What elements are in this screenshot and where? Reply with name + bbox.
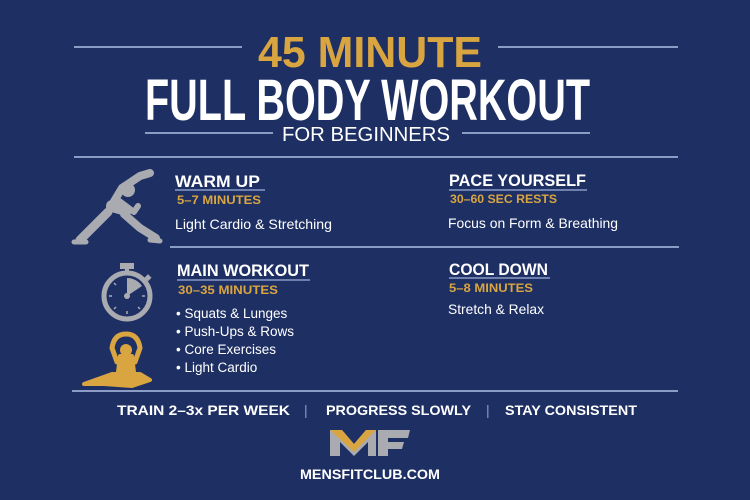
title: 45 minute: 45 MINUTE [258, 28, 482, 77]
footer tips [117, 402, 637, 418]
section: pace yourself: Focus on Form & Breathing [448, 215, 618, 231]
section: cool down [448, 260, 550, 317]
section: main workout: MAIN WORKOUT [177, 261, 310, 280]
section: main workout: • Squats & Lunges [176, 306, 288, 321]
section: cool down: 5–8 MINUTES [449, 281, 533, 295]
icon: yoga figure [84, 334, 150, 386]
subtitle: FOR BEGINNERS [282, 124, 450, 146]
section: main workout: • Core Exercises [176, 342, 276, 357]
section: warm up: 5–7 MINUTES [177, 193, 261, 207]
section: warm up [175, 172, 332, 232]
footer tips: TRAIN 2–3x PER WEEK [117, 402, 290, 418]
footer tips: | [304, 402, 308, 418]
section: cool down: COOL DOWN [449, 260, 548, 279]
section: main workout: 30–35 MINUTES [178, 283, 278, 297]
section: pace yourself: PACE YOURSELF [449, 171, 586, 190]
footer tips: STAY CONSISTENT [505, 402, 637, 418]
section: main workout [176, 261, 310, 375]
website: MENSFITCLUB.COM [300, 466, 440, 482]
section: warm up: Light Cardio & Stretching [175, 216, 332, 232]
section: pace yourself: 30–60 SEC RESTS [450, 192, 557, 206]
section: pace yourself [448, 171, 618, 231]
logo: MF [330, 430, 410, 456]
icon: stopwatch [104, 263, 152, 319]
section: main workout: • Light Cardio [176, 360, 257, 375]
footer tips: PROGRESS SLOWLY [326, 402, 472, 418]
section: cool down: Stretch & Relax [448, 301, 544, 317]
icon: stretching figure [74, 173, 160, 242]
footer tips: | [486, 402, 490, 418]
section: main workout: • Push-Ups & Rows [176, 324, 294, 339]
section: warm up: WARM UP [175, 172, 260, 191]
